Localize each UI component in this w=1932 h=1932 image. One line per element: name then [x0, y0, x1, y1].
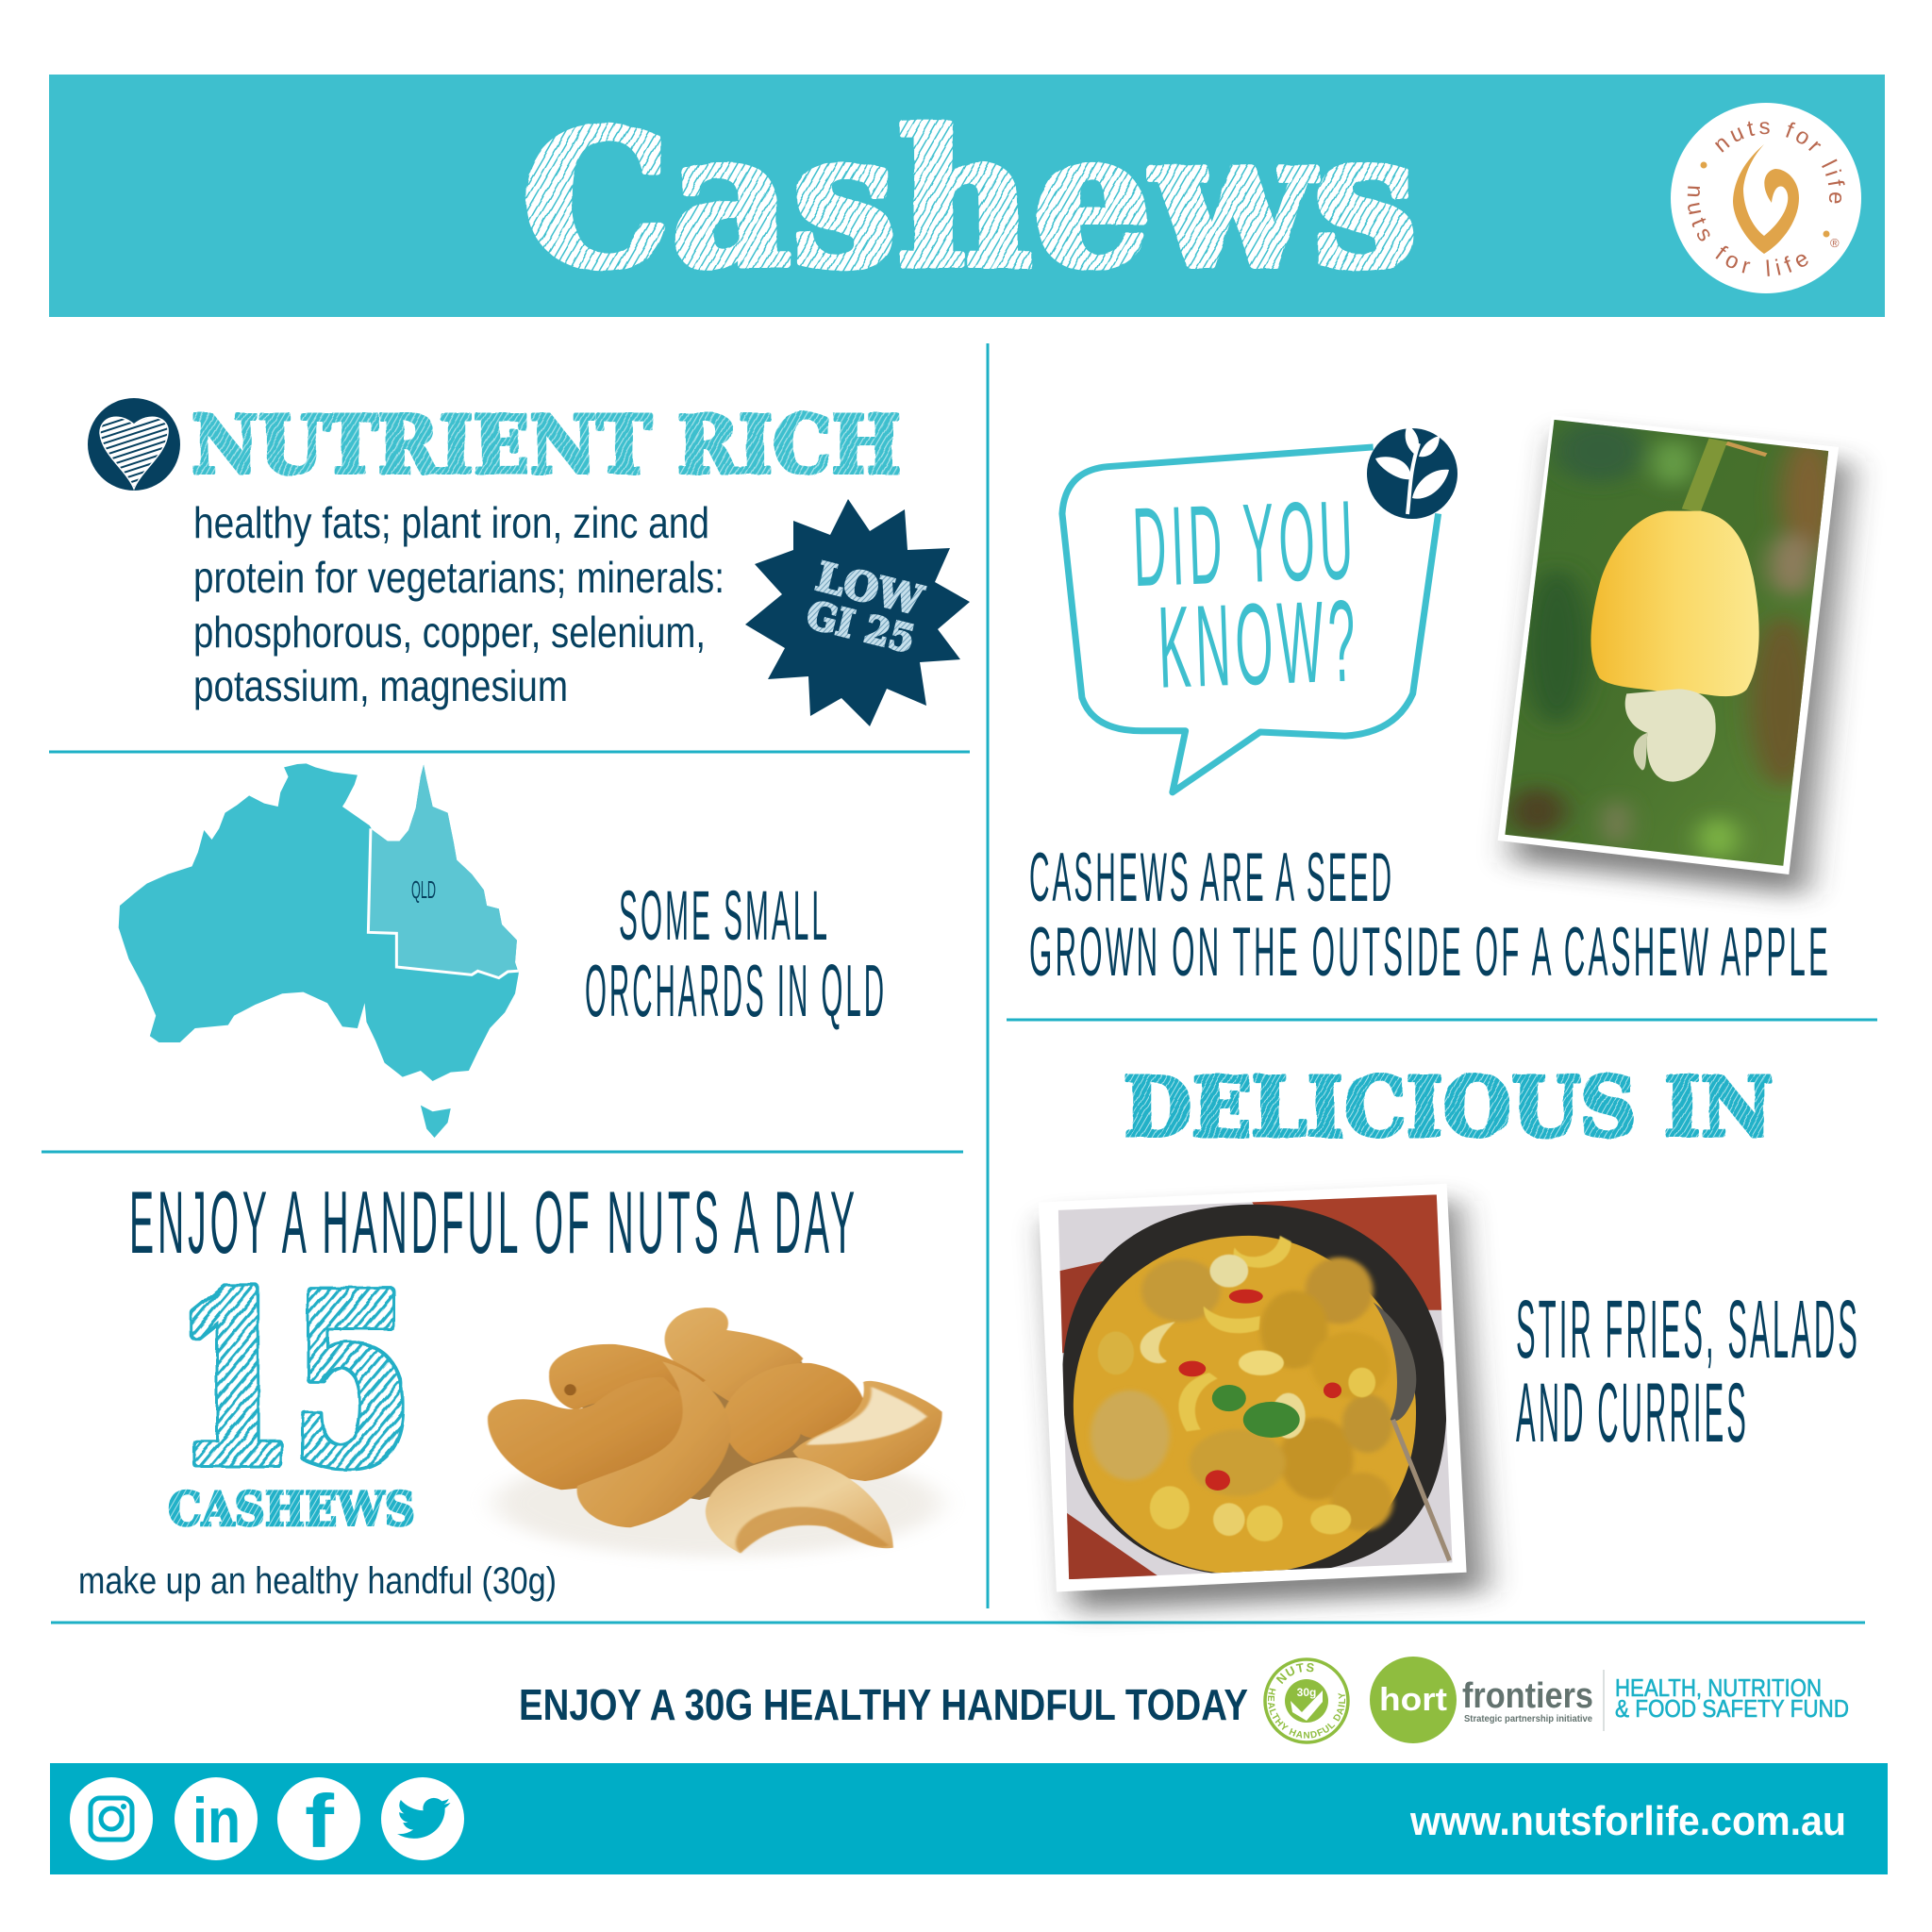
number: 15: 15 — [175, 1247, 411, 1515]
badge: low GI 25: GI 25 — [802, 592, 919, 662]
logo: hort frontiers: frontiers — [1462, 1676, 1593, 1716]
badge: nuts healthy handful daily: HEALTHY HANDFUL DAILY — [1268, 1689, 1345, 1739]
panel: did you know — [1029, 412, 1851, 991]
logo: hort frontiers — [1370, 1657, 1593, 1743]
badge: low GI 25 — [745, 499, 970, 726]
icon: linkedin — [175, 1777, 258, 1860]
infographic canvas: ORCHARDS IN QLD — [585, 949, 887, 1032]
logo: hort frontiers: Strategic partnership initiative — [1464, 1714, 1592, 1724]
icon: instagram — [70, 1777, 153, 1860]
text: cashews are a seed — [1029, 840, 1831, 991]
text: make up a healthy handful: make up an healthy handful (30g) — [78, 1560, 557, 1602]
text: nutrient list: potassium, magnesium — [193, 661, 568, 710]
text: health, nutrition and food safety fund: HEALTH, NUTRITION — [1615, 1674, 1822, 1702]
photo: cashew curry — [1039, 1184, 1487, 1611]
text: nutrient list: healthy fats; plant iron, zinc and — [193, 498, 709, 547]
label: cashews: CASHEWS — [168, 1481, 415, 1537]
footer band — [50, 1763, 1888, 1874]
icon: facebook: f — [305, 1779, 334, 1863]
text: some small orchards: SOME SMALL — [619, 876, 830, 955]
panel: growing region — [119, 763, 887, 1138]
icon: twitter — [381, 1777, 464, 1860]
logo: hort frontiers: hort — [1379, 1682, 1447, 1718]
sponsor strip — [519, 1657, 1849, 1744]
tagline: ENJOY A 30G HEALTHY HANDFUL TODAY — [519, 1680, 1248, 1729]
photo: cashew apple — [1498, 412, 1851, 895]
panel: growing region: QLD — [411, 875, 436, 904]
speech bubble — [1062, 447, 1439, 792]
icon: leaf sprig — [1367, 425, 1457, 519]
icon: linkedin: in — [192, 1785, 241, 1857]
text: nutrient list — [193, 498, 724, 710]
logo: nuts for life: ® — [1830, 236, 1840, 250]
text: stir fries, salads and curries — [1516, 1284, 1860, 1459]
heading: delicious in: DELICIOUS IN — [1124, 1058, 1773, 1156]
icon: facebook — [277, 1777, 360, 1863]
header band — [49, 75, 1885, 317]
badge: nuts healthy handful daily: NUTS — [1275, 1663, 1314, 1685]
text: nutrient list: phosphorous, copper, selenium, — [193, 608, 706, 657]
logo: nuts for life — [1671, 103, 1861, 293]
logo: nuts for life: nuts for life — [1715, 121, 1845, 204]
photo: pile of cashews — [488, 1307, 942, 1557]
heading: nutrient rich: NUTRIENT RICH — [192, 398, 901, 491]
panel: handful — [78, 1173, 942, 1602]
panel: nutrient rich — [88, 398, 970, 726]
title: Cashews — [522, 90, 1418, 309]
panel: did you know: DID YOU — [1131, 477, 1359, 610]
text: nutrient list: protein for vegetarians; minerals: — [193, 553, 724, 602]
badge: low GI 25: LOW — [811, 553, 928, 625]
badge: nuts healthy handful daily: 30g — [1297, 1686, 1316, 1699]
website url: www.nutsforlife.com.au — [1409, 1798, 1846, 1844]
section dividers — [42, 343, 1877, 1623]
panel: delicious in — [1039, 1058, 1860, 1611]
text: some small orchards — [585, 876, 887, 1032]
infographic canvas: ENJOY A HANDFUL OF NUTS A DAY — [129, 1173, 858, 1272]
text: health, nutrition and food safety fund: & FOOD SAFETY FUND — [1615, 1694, 1849, 1723]
icon: sketched heart — [88, 398, 180, 491]
map of australia — [119, 763, 519, 1138]
heading: did you know — [1131, 477, 1362, 713]
text: cashews are a seed: CASHEWS ARE A SEED — [1029, 840, 1394, 916]
panel: did you know: KNOW? — [1156, 576, 1362, 713]
badge: nuts healthy handful daily — [1263, 1657, 1350, 1744]
logo: nuts for life: nuts for life — [1687, 187, 1808, 276]
text: health, nutrition and food safety fund — [1615, 1674, 1849, 1723]
